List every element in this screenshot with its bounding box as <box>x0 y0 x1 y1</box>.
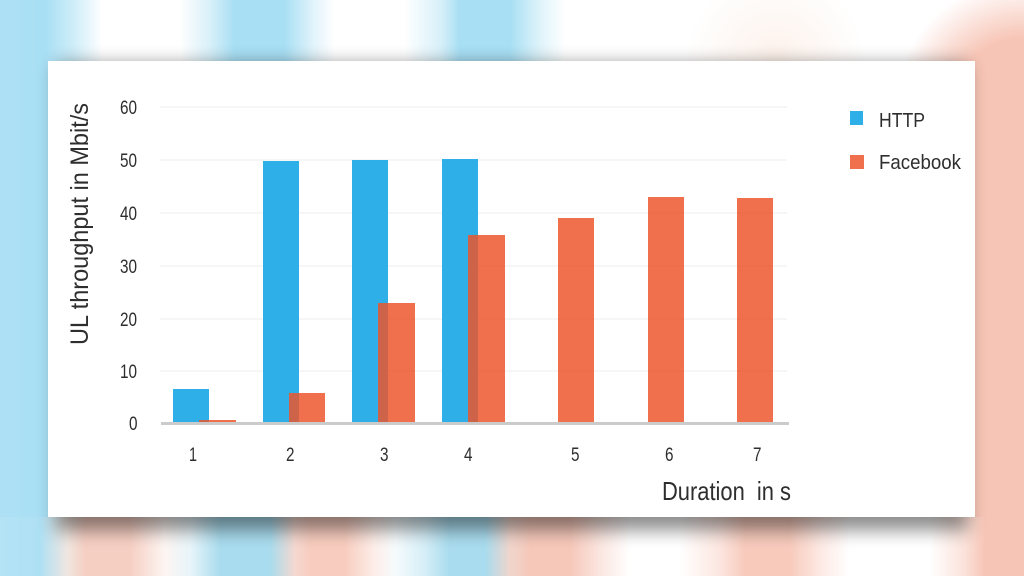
legend item: Facebook: Facebook <box>879 152 962 174</box>
panel: card shadow <box>56 64 968 530</box>
x-axis title: Duration in s <box>662 476 791 506</box>
x-axis tick labels: 4 <box>464 445 473 466</box>
legend <box>850 110 962 174</box>
x-axis tick labels <box>189 445 762 466</box>
y-axis tick labels: 40 <box>120 204 137 225</box>
HTTP bars <box>173 159 478 423</box>
x axis line <box>161 422 789 425</box>
Facebook bars <box>199 197 773 423</box>
y-axis tick labels: 0 <box>129 414 138 435</box>
y-axis tick labels: 20 <box>120 310 137 331</box>
panel: white chart card <box>48 61 975 517</box>
bar chart <box>66 98 791 506</box>
x-axis tick labels: 1 <box>189 445 197 466</box>
y-axis tick labels: 10 <box>120 362 137 383</box>
x-axis tick labels: 6 <box>665 445 674 466</box>
y-axis title: UL throughput in Mbit/s <box>66 103 94 345</box>
y-axis tick labels: 30 <box>120 257 137 278</box>
legend item: HTTP: HTTP <box>879 110 925 132</box>
x-axis tick labels: 2 <box>286 445 294 466</box>
x-axis tick labels: 3 <box>380 445 388 466</box>
x-axis tick labels: 5 <box>571 445 580 466</box>
x-axis tick labels: 7 <box>753 445 762 466</box>
y-axis tick labels: 60 <box>120 98 137 119</box>
y-axis tick labels <box>120 98 138 435</box>
y-axis tick labels: 50 <box>120 151 137 172</box>
